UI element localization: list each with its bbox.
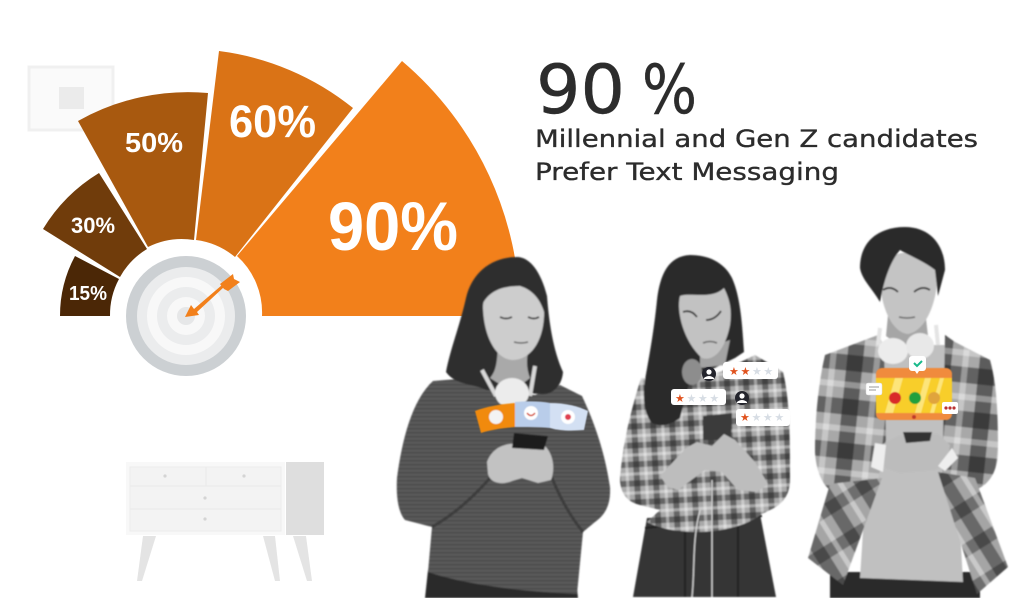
rating bubble top: ★★★★ [729, 365, 775, 378]
icon: arrow [185, 274, 240, 317]
heading statistic: % [642, 51, 697, 130]
rating bubble bottom [736, 409, 790, 426]
target icon with arrow [126, 256, 246, 376]
segment 30% [43, 173, 147, 277]
rating bubble bottom: ★★★★ [740, 411, 786, 424]
icon: reaction cards strip [475, 401, 588, 433]
segment 50% [78, 92, 208, 247]
dresser furniture [126, 462, 324, 581]
wall picture frame [29, 67, 113, 130]
segment 15% [60, 256, 119, 316]
rating bubble middle [671, 389, 726, 405]
person: girl in sweater [397, 257, 610, 598]
icon: text bubble [866, 383, 882, 395]
rating bubble middle: ★★★★ [675, 392, 721, 405]
segment 60% [196, 51, 353, 257]
icon: typing bubble [942, 402, 958, 414]
segment 30%: 30% [71, 213, 115, 238]
segment 50%: 50% [125, 127, 183, 158]
icon: feedback tablet with emoji faces [876, 368, 952, 420]
rating bubble top [723, 362, 778, 379]
fan chart [43, 51, 520, 316]
segment 15%: 15% [69, 283, 107, 305]
heading statistic: 90 [536, 51, 625, 130]
person: girl in plaid shirt [620, 255, 790, 597]
heading description: Millennial and Gen Z candidates [535, 125, 978, 153]
heading description: Prefer Text Messaging [535, 158, 839, 186]
segment 90% [237, 61, 520, 316]
person: boy in open plaid shirt [808, 227, 1008, 598]
icon: user avatar badges [702, 367, 749, 405]
segment 90%: 90% [328, 188, 458, 265]
segment 60%: 60% [229, 96, 316, 147]
icon: check bubble [909, 356, 926, 374]
